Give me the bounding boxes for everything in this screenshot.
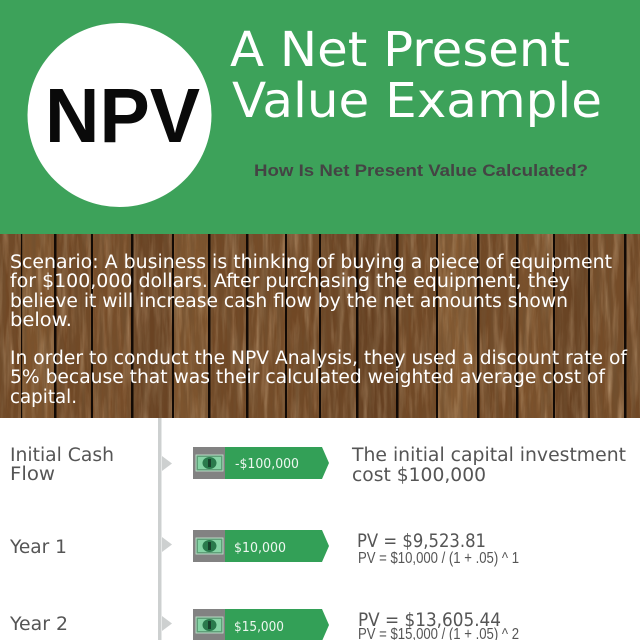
present value result [357,530,519,567]
label: initial cash flow: Flow [10,464,55,485]
wood scenario panel [0,234,640,418]
label: initial cash flow [10,445,114,485]
value badge: $15,000 [234,619,284,635]
arrow marker [162,616,172,631]
value badge [193,530,329,562]
arrow marker [162,537,172,552]
wood plank background [0,234,640,418]
scenario text: Scenario: A business is thinking of buying a piece of equipment [10,252,612,273]
label: year 1: Year 1 [9,537,67,558]
scenario text: In order to conduct the NPV Analysis, they used a discount rate of [10,348,627,369]
scenario text [10,252,627,408]
present value result: PV = $10,000 / (1 + .05) ^ 1 [358,550,519,567]
row: year 1 [9,530,519,567]
description [351,445,626,486]
value badge [193,609,329,640]
scenario text: 5% because that was their calculated weighted average cost of [10,367,605,388]
scenario text: for $100,000 dollars. After purchasing the equipment, they [10,271,570,292]
description: cost $100,000 [352,465,486,486]
value badge: -$100,000 [235,457,299,472]
NPV circle badge: NPV [45,73,200,159]
description: The initial capital investment [351,445,626,466]
value badge: $10,000 [234,540,286,556]
present value result: PV = $13,605.44 [358,609,501,631]
present value result: PV = $9,523.81 [357,530,486,552]
subtitle: How Is Net Present Value Calculated? [254,162,588,180]
title [230,22,602,129]
scenario text: below. [10,310,72,331]
row: year 2 [9,609,519,640]
timeline vertical line [158,418,162,640]
scenario text: believe it will increase cash flow by the net amounts shown [10,291,568,312]
scenario text: capital. [10,387,77,408]
title: Value Example [232,73,602,129]
label: year 2: Year 2 [9,614,68,635]
NPV circle badge [28,23,212,207]
header panel [0,0,640,234]
row: initial cash flow [10,445,626,486]
value badge [193,447,329,479]
title: A Net Present [230,22,570,78]
label: initial cash flow: Initial Cash [10,445,114,466]
arrow marker [162,456,172,471]
